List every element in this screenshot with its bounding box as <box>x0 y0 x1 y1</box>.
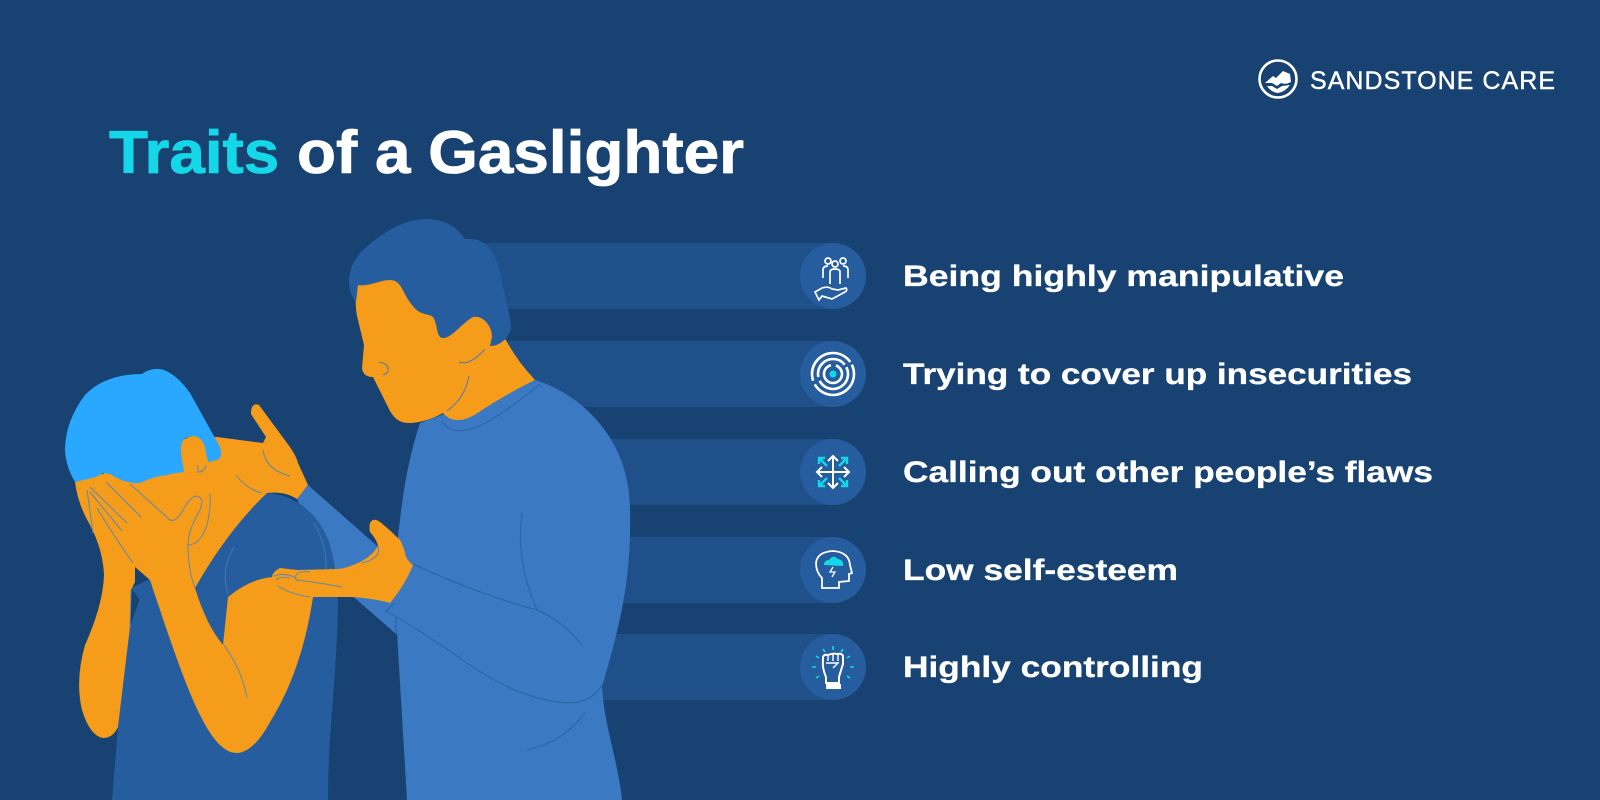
logo: Sandstone Care: SANDSTONE CARE <box>1310 67 1555 95</box>
man's body <box>396 380 630 800</box>
man's clothing lines <box>386 384 602 750</box>
woman's skin lines <box>87 450 290 698</box>
logo: Sandstone Care <box>1260 60 1555 98</box>
title: Traits of a Gaslighter <box>109 119 744 186</box>
illustration: man <box>297 219 630 800</box>
woman's small sleeve <box>131 580 148 600</box>
man's far arm <box>297 485 410 645</box>
woman's hair <box>65 369 221 483</box>
woman's forearm <box>150 570 313 753</box>
woman's ear <box>181 436 206 473</box>
illustration: man's front hand and sleeve <box>272 520 413 603</box>
icon: maze <box>800 341 866 407</box>
trait text list: Trying to cover up insecurities <box>903 358 1412 391</box>
woman's sleeve lines <box>225 523 326 594</box>
trait text list: Being highly manipulative <box>903 260 1344 293</box>
man's neck and face <box>356 270 535 423</box>
trait text list <box>903 260 1433 684</box>
icon: head with storm cloud <box>800 537 866 603</box>
woman's back hand and arm <box>75 479 135 738</box>
man's face lines <box>379 349 485 411</box>
icon: raised fist <box>800 634 866 700</box>
man's hair <box>349 219 511 346</box>
woman's body <box>112 493 338 800</box>
trait text list: Low self-esteem <box>903 554 1178 587</box>
woman's neck, face and front hand <box>85 404 308 588</box>
trait text list: Calling out other people’s flaws <box>903 456 1433 489</box>
trait text list: Highly controlling <box>903 651 1203 684</box>
illustration: woman <box>65 369 338 800</box>
trait bars <box>470 243 833 700</box>
icon: arrows in all directions <box>800 439 866 505</box>
icon: people in a hand <box>800 243 866 309</box>
